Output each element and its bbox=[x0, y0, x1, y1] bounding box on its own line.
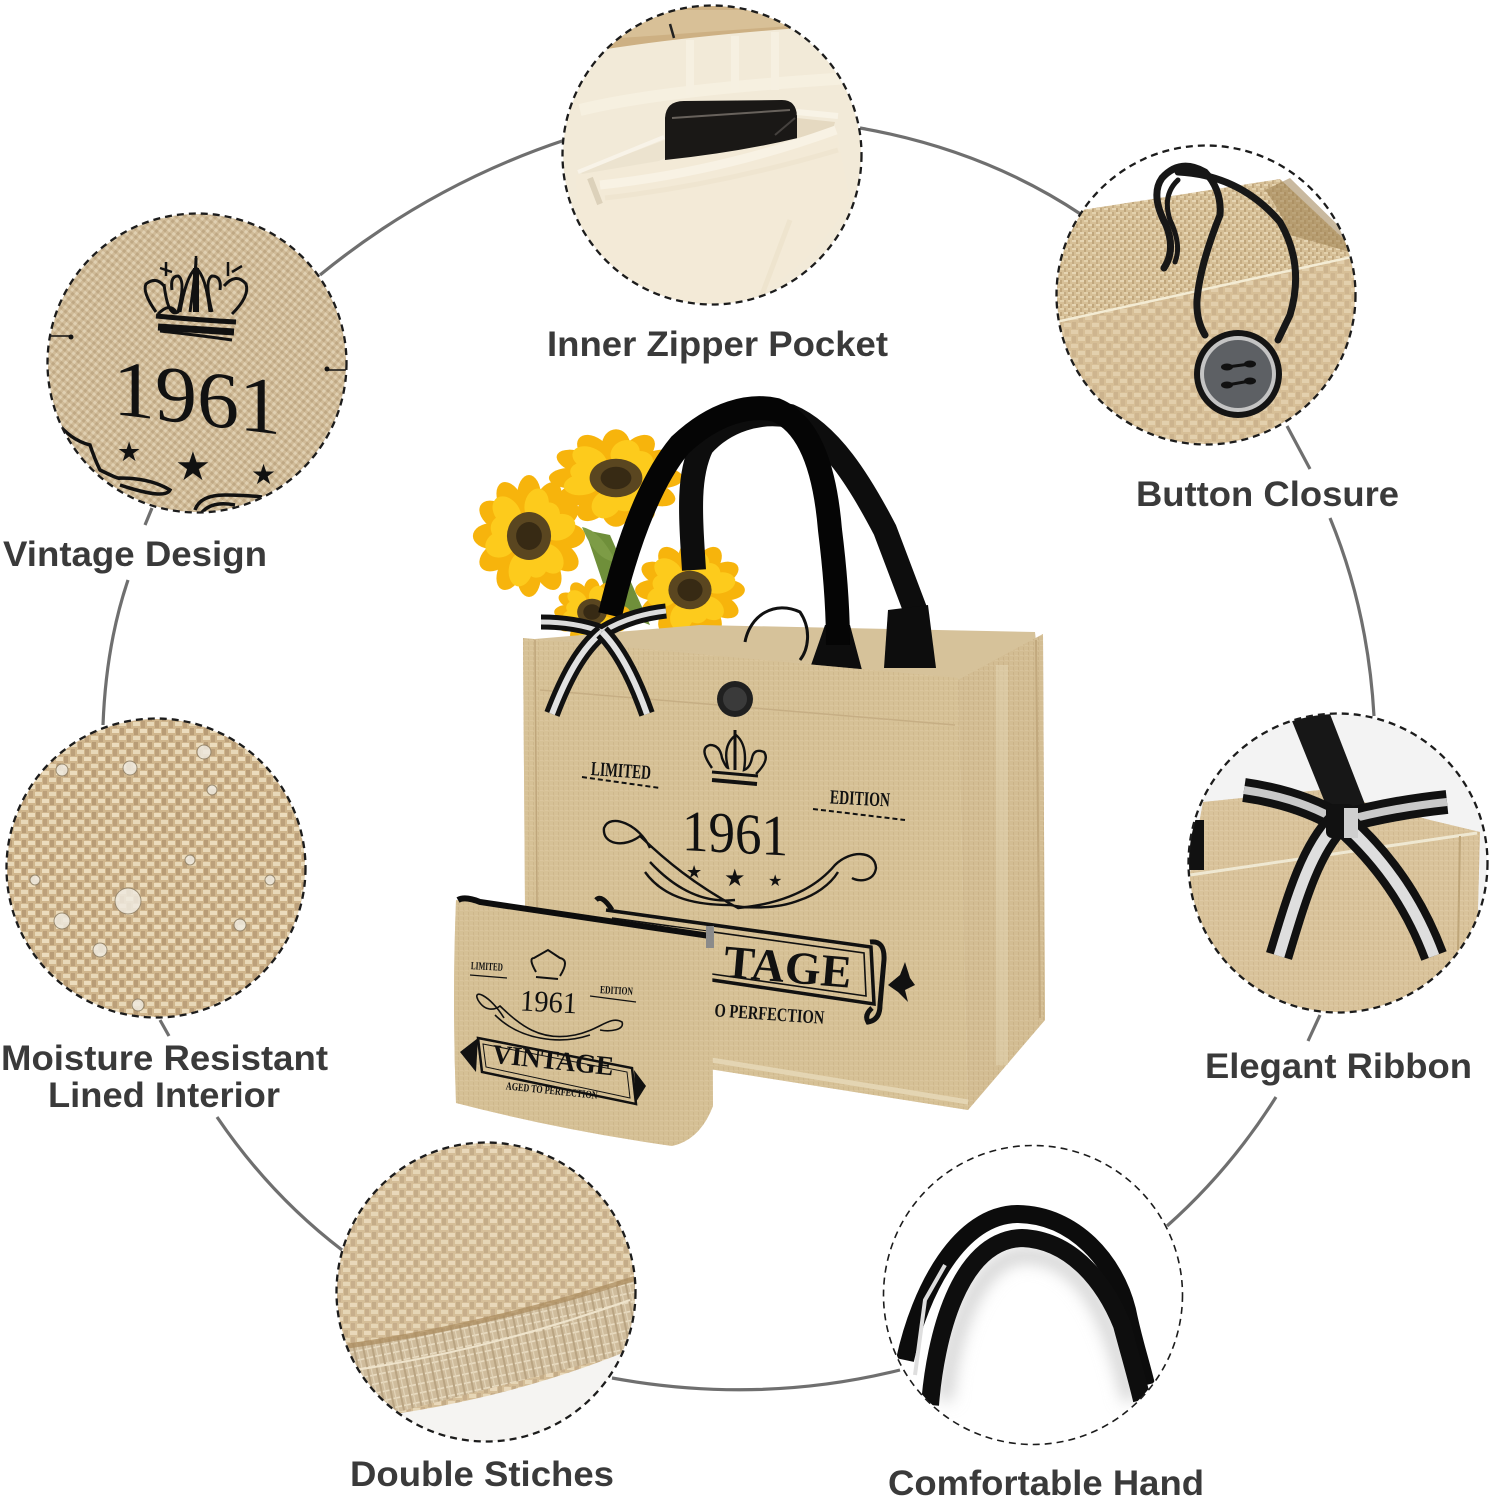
pouch print: 1961 bbox=[519, 984, 578, 1020]
tote print: ★ bbox=[768, 873, 782, 890]
bow ribbon bbox=[541, 611, 666, 714]
panel: moisture resistant detail bbox=[0, 710, 315, 1030]
panel: vintage design detail: ★ bbox=[175, 444, 211, 489]
label: moisture resistant lined interior bbox=[1, 1039, 328, 1115]
label: moisture resistant lined interior: Lined Interior bbox=[48, 1076, 280, 1115]
tote print: O PERFECTION bbox=[714, 1000, 825, 1029]
button bbox=[1194, 330, 1282, 418]
tote print: ★ bbox=[724, 866, 746, 892]
panel: elegant ribbon detail bbox=[1180, 705, 1492, 1025]
tote print: ★ bbox=[686, 862, 702, 882]
back handle bbox=[691, 414, 916, 650]
sunflowers bbox=[473, 429, 752, 665]
pouch print: AGED TO PERFECTION bbox=[505, 1080, 598, 1102]
vintage banner bbox=[606, 910, 874, 1004]
icon: crown bbox=[145, 256, 247, 340]
pouch print: LIMITED bbox=[471, 960, 503, 974]
flourish bbox=[604, 821, 876, 908]
tote print: TAGE bbox=[722, 936, 854, 998]
panel: vintage design detail: 1961 bbox=[113, 343, 281, 453]
tote front bbox=[523, 638, 968, 1110]
pouch print: EDITION bbox=[600, 984, 633, 998]
handle bbox=[1292, 714, 1365, 806]
elastic loop bbox=[1157, 166, 1296, 340]
label: elegant ribbon: Elegant Ribbon bbox=[1205, 1047, 1472, 1086]
central product: tote bag and pouch bbox=[454, 408, 1045, 1146]
pouch print bbox=[460, 950, 646, 1104]
label: button closure: Button Closure bbox=[1136, 475, 1399, 514]
front handle bbox=[610, 408, 838, 645]
button bbox=[717, 681, 753, 717]
tote print: 1961 bbox=[682, 798, 788, 869]
tote print: LIMITED bbox=[590, 758, 652, 784]
bow bbox=[1244, 790, 1447, 956]
label: double stiches: Double Stiches bbox=[350, 1455, 614, 1494]
tote handle bases bbox=[810, 625, 862, 670]
tote print bbox=[582, 730, 915, 1029]
cosmetic pouch bbox=[454, 898, 714, 1146]
connecting ring arcs bbox=[103, 128, 1374, 1390]
panel: button closure detail bbox=[1050, 140, 1360, 450]
panel: vintage design detail bbox=[46, 212, 348, 514]
tote inner back bbox=[523, 625, 1040, 690]
pouch print: VINTAGE bbox=[491, 1039, 615, 1081]
panel: vintage design detail: ★ bbox=[251, 460, 276, 491]
phone in pocket bbox=[665, 100, 797, 165]
panel: double stitches detail bbox=[330, 1135, 645, 1455]
label: moisture resistant lined interior: Moisture Resistant bbox=[1, 1039, 328, 1078]
pocket front bbox=[581, 136, 831, 304]
tote gusset bbox=[958, 634, 1045, 1110]
crown print bbox=[704, 730, 766, 784]
zipper bbox=[458, 898, 710, 936]
label: vintage design: Vintage Design bbox=[3, 535, 267, 574]
panel: comfortable handle detail bbox=[880, 1140, 1190, 1450]
label: inner zipper pocket: Inner Zipper Pocket bbox=[547, 325, 888, 364]
pocket opening bbox=[797, 118, 835, 138]
panel: inner zipper pocket detail bbox=[555, 0, 875, 310]
panel: vintage design detail: ★ bbox=[117, 437, 141, 467]
tote print: EDITION bbox=[829, 786, 891, 812]
